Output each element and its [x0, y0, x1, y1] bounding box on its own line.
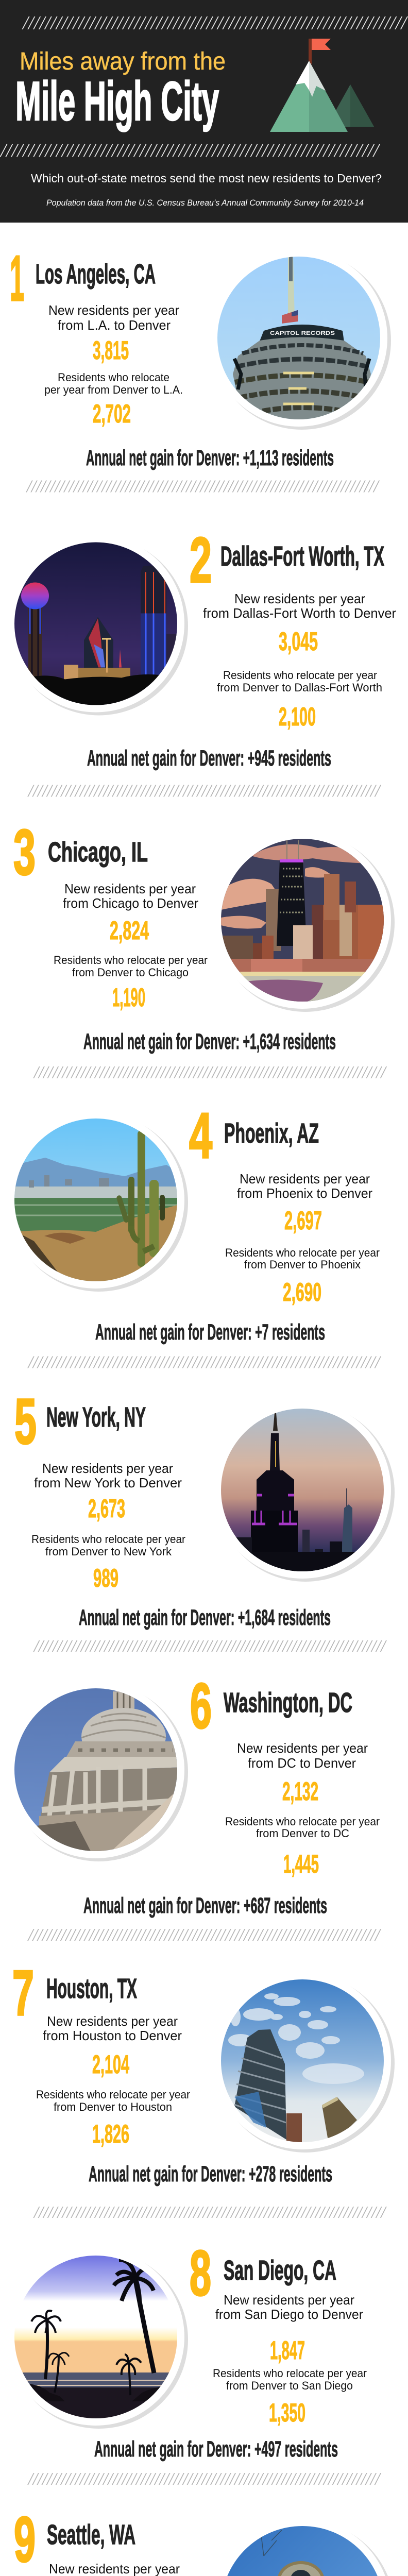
- outbound label: Residents who relocate per year: [36, 2088, 190, 2101]
- section 4: Phoenix: from Denver to Phoenix: [244, 1258, 361, 1271]
- inbound number: 2,673: [88, 1494, 125, 1523]
- section 8: San Diego: [7, 2238, 367, 2462]
- rank number: 7: [12, 1958, 34, 2029]
- inbound label: New residents per year: [240, 1171, 370, 1187]
- outbound number: 2,100: [279, 702, 316, 731]
- section 7: Houston: from Denver to Houston: [54, 2100, 172, 2113]
- title line 1: Miles away from the: [20, 48, 226, 75]
- inbound label: New residents per year: [234, 591, 365, 606]
- city name: Seattle, WA: [47, 2519, 135, 2550]
- section 3: Chicago: from Denver to Chicago: [72, 966, 189, 979]
- outbound label: Residents who relocate per year: [54, 954, 208, 967]
- divider: [30, 785, 380, 796]
- section 8: San Diego: from Denver to San Diego: [226, 2379, 353, 2392]
- section 8: San Diego: from San Diego to Denver: [215, 2307, 363, 2322]
- divider: [36, 1066, 385, 1078]
- inbound label: New residents per year: [42, 1461, 173, 1476]
- photo: Capitol Records tower: [210, 249, 391, 430]
- photo: Phoenix desert with saguaro: [7, 1111, 188, 1292]
- inbound number: 3,815: [93, 336, 129, 365]
- inbound number: 2,824: [110, 916, 149, 945]
- rank number: 9: [14, 2504, 36, 2575]
- subtitle: Which out-of-state metros send the most new residents to Denver?: [31, 172, 382, 185]
- icon: mountain with flag: [270, 39, 374, 132]
- rank number: 3: [13, 817, 36, 888]
- inbound label: New residents per year: [48, 302, 179, 318]
- photo: Empire State Building at dusk: [214, 1401, 395, 1582]
- section 4: Phoenix: [7, 1100, 380, 1345]
- section 1: Los Angeles: from L.A. to Denver: [58, 317, 171, 333]
- outbound label: Residents who relocate per year: [213, 2367, 367, 2380]
- rank number: 2: [190, 525, 212, 596]
- outbound number: 1,350: [269, 2398, 305, 2427]
- outbound number: 1,826: [92, 2120, 129, 2148]
- outbound label: Residents who relocate per year: [31, 1533, 185, 1546]
- section 4: Phoenix: from Phoenix to Denver: [237, 1185, 372, 1201]
- photo: Capitol dome: [7, 1681, 188, 1861]
- section 6: Washington: [7, 1671, 380, 1918]
- city name: Los Angeles, CA: [36, 259, 156, 290]
- rank number: 4: [189, 1100, 212, 1172]
- section 9: Seattle: [14, 2516, 388, 2576]
- section 5: New York: [14, 1386, 395, 1630]
- section 6: Washington: from Denver to DC: [256, 1827, 349, 1840]
- outbound number: 1,445: [283, 1850, 319, 1878]
- divider: [36, 2207, 385, 2218]
- photo: Capitol Records tower: CAPITOL RECORDS: [270, 330, 335, 336]
- photo: Space Needle: [227, 2526, 388, 2576]
- photo: Chicago skyline: [214, 832, 395, 1012]
- section 5: New York: from New York to Denver: [34, 1475, 182, 1490]
- outbound number: 2,702: [93, 399, 131, 428]
- data note: Population data from the U.S. Census Bureau’s Annual Community Survey for 2010-14: [46, 198, 364, 208]
- outbound label: Residents who relocate per year: [225, 1815, 380, 1828]
- rank number: 5: [14, 1386, 37, 1458]
- photo: San Diego palms at sunset: [7, 2248, 188, 2429]
- divider: [30, 1356, 380, 1368]
- outbound number: 1,190: [112, 983, 145, 1012]
- city name: Chicago, IL: [48, 837, 148, 868]
- header panel: [0, 0, 408, 223]
- inbound label: New residents per year: [237, 1740, 368, 1756]
- city name: Phoenix, AZ: [224, 1118, 319, 1149]
- section 1: Los Angeles: [10, 243, 391, 470]
- section 7: Houston: from Houston to Denver: [43, 2028, 182, 2043]
- section 6: Washington: from DC to Denver: [248, 1755, 356, 1771]
- city name: Houston, TX: [46, 1973, 137, 2004]
- rank number: 6: [190, 1671, 212, 1742]
- outbound label: Residents who relocate per year: [223, 669, 377, 682]
- rank number: 8: [190, 2238, 211, 2309]
- outbound number: 989: [93, 1564, 118, 1592]
- divider: [29, 480, 379, 493]
- divider: [36, 1640, 385, 1652]
- inbound number: 2,697: [284, 1206, 322, 1235]
- inbound label: New residents per year: [224, 2292, 354, 2308]
- photo: Dallas skyline at night: [7, 535, 188, 715]
- section 7: Houston: [12, 1958, 395, 2187]
- inbound label: New residents per year: [64, 881, 196, 896]
- section 3: Chicago: [13, 817, 395, 1054]
- section 2: Dallas-Fort Worth: from Denver to Dallas-Fort Worth: [217, 681, 382, 694]
- section 1: Los Angeles: per year from Denver to L.A.: [44, 383, 183, 396]
- inbound label: New residents per year: [47, 2013, 178, 2029]
- section 3: Chicago: from Chicago to Denver: [63, 895, 198, 911]
- photo: Houston towers and clouds: [214, 1972, 395, 2153]
- outbound label: Residents who relocate per year: [225, 1246, 380, 1259]
- inbound number: 3,045: [279, 627, 318, 656]
- outbound number: 2,690: [283, 1278, 321, 1307]
- city name: New York, NY: [46, 1402, 146, 1433]
- section 5: New York: from Denver to New York: [45, 1545, 172, 1558]
- outbound label: Residents who relocate: [58, 371, 169, 384]
- divider: [30, 1929, 380, 1941]
- inbound number: 1,847: [270, 2336, 305, 2365]
- section 2: Dallas-Fort Worth: [7, 525, 396, 771]
- section 2: Dallas-Fort Worth: from Dallas-Fort Worth to Denver: [203, 605, 396, 621]
- inbound number: 2,104: [92, 2050, 129, 2079]
- section 1: Los Angeles: 1: [10, 243, 24, 314]
- divider: [30, 2473, 380, 2485]
- inbound number: 2,132: [282, 1777, 318, 1806]
- title line 2: Mile High City: [15, 70, 219, 132]
